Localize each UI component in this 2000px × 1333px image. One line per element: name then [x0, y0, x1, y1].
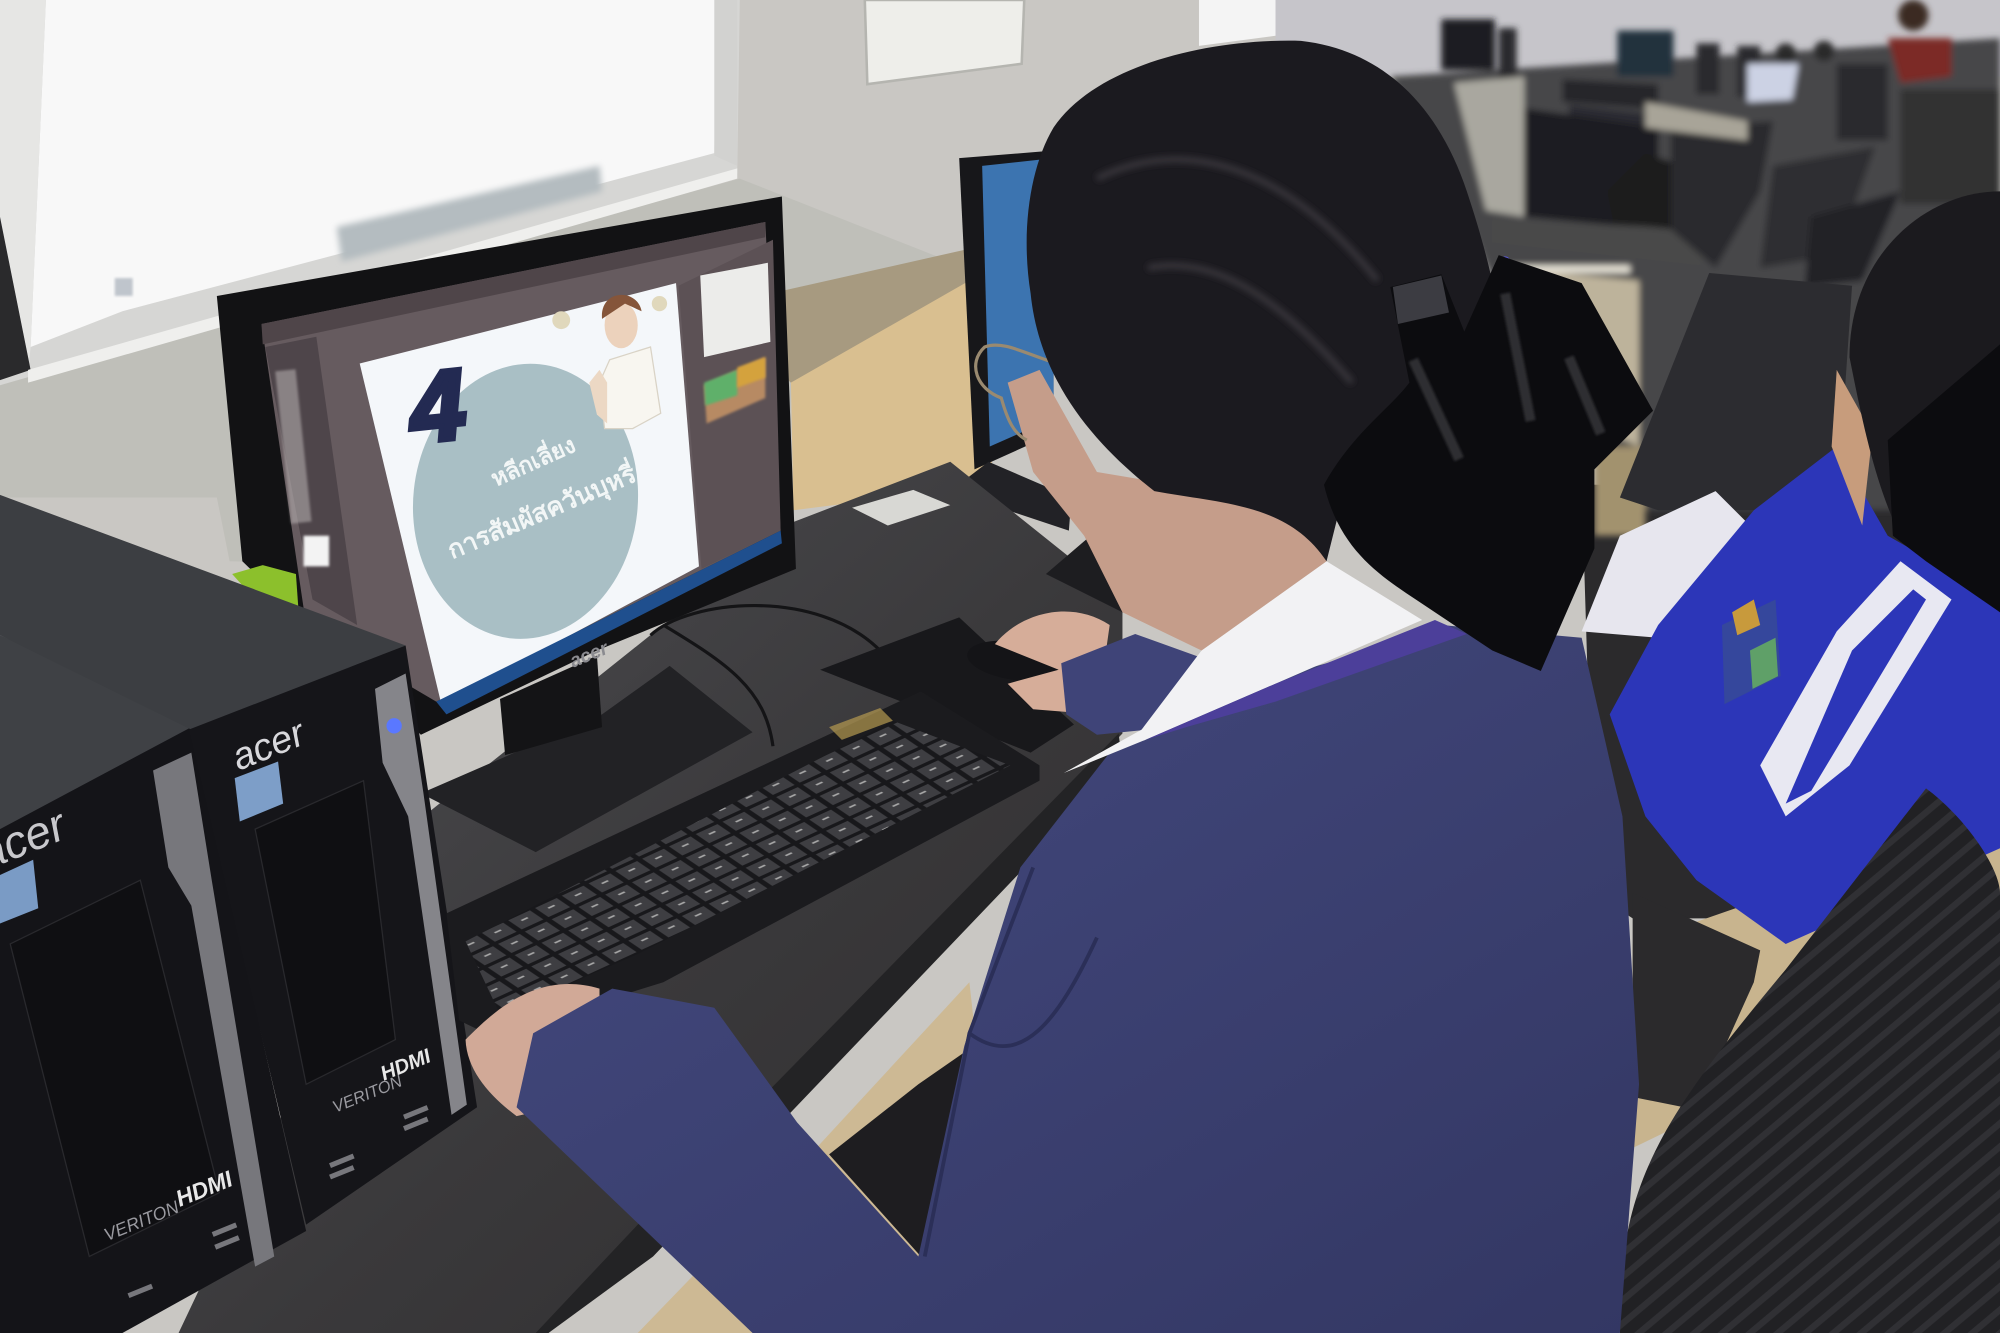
model label: VERITON: [330, 1072, 405, 1117]
green bottle cap: [232, 565, 298, 610]
Thai subheading: การสัมผัสควันบุหรี่: [442, 455, 641, 567]
sweater: [517, 625, 1639, 1333]
rear office chair: [1620, 273, 1852, 510]
status light: [1500, 256, 1510, 267]
power light: [386, 718, 402, 733]
glasses: [976, 345, 1078, 440]
hand on keyboard: [466, 984, 599, 1116]
jacket logo: [1722, 600, 1781, 704]
sleeve seam: [925, 867, 1097, 1256]
neck: [1832, 370, 1872, 526]
computer mouse: [965, 635, 1066, 686]
projector screen: [0, 0, 740, 385]
right computer tower: [0, 495, 477, 1225]
cable port plate: [852, 490, 950, 526]
taskbar: [436, 531, 782, 714]
mouse pad: [820, 617, 1074, 753]
hand on mouse: [995, 611, 1110, 714]
foreground chair: [1620, 788, 2000, 1333]
keyboard: [446, 691, 1040, 1036]
HDMI label: HDMI: [172, 1165, 237, 1212]
right student: [1582, 191, 2000, 944]
main student: [466, 41, 1653, 1333]
main monitor: [217, 196, 969, 852]
second monitor: [950, 151, 1071, 531]
HDMI label: HDMI: [377, 1045, 435, 1085]
mouse sleeve: [1061, 634, 1199, 735]
monitor stand: [421, 666, 753, 852]
monitor bezel: [217, 196, 796, 735]
face: [1008, 370, 1327, 651]
number 4: 4: [402, 349, 471, 465]
collar: [1064, 561, 1422, 773]
rear desk: [1633, 893, 1760, 1110]
whiteboard: [865, 0, 1024, 84]
blue jacket: [1610, 446, 2000, 944]
cables: [651, 606, 969, 746]
rear student's white shoulder: [1582, 491, 1747, 638]
silver strip: [375, 674, 467, 1115]
USB ports: [329, 1105, 429, 1179]
processor badge: [0, 860, 38, 924]
application window: [261, 222, 781, 702]
dark shape below the desk: [829, 1052, 964, 1256]
hair bow: [1324, 255, 1653, 671]
drive bay: [255, 781, 395, 1084]
brand logo: acer: [226, 711, 313, 779]
bow ribbon highlights: [1413, 293, 1601, 459]
USB ports: [128, 1223, 240, 1298]
artboard: [360, 283, 699, 704]
drive bay: [10, 880, 219, 1256]
desk: [179, 462, 1122, 1333]
right panels: [679, 240, 781, 569]
rear keyboard: [1046, 536, 1205, 620]
tool panel: [265, 337, 357, 625]
bow silver bands: [1393, 276, 1449, 324]
model label: VERITON: [101, 1197, 182, 1245]
hair highlights: [1097, 160, 1378, 383]
hair bow: [1888, 344, 2000, 612]
Thai heading: หลีกเลี่ยง: [485, 428, 579, 492]
hair: [1027, 41, 1505, 561]
character illustration: [589, 295, 661, 429]
circle panel: [399, 353, 652, 650]
sun icons: [552, 296, 667, 329]
background classroom rows: [1390, 0, 2000, 536]
window: [1199, 0, 1276, 46]
hair: [1849, 191, 2000, 612]
left computer tower: [0, 635, 306, 1333]
monitor logo: acer: [567, 638, 613, 672]
processor badge: [235, 762, 283, 821]
collar stripe: [1145, 620, 1467, 740]
